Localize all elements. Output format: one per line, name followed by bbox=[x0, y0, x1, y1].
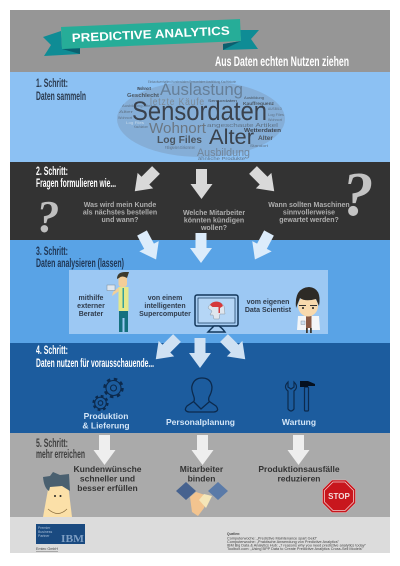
text: customers: besser erfüllen bbox=[77, 483, 138, 493]
heading: step 4: Daten nutzen für vorausschauende... bbox=[36, 358, 154, 370]
icon: tools bbox=[286, 381, 315, 411]
question: customer: als nächstes bestellen bbox=[83, 210, 157, 216]
panel: header bbox=[10, 10, 390, 72]
heading: step 4: 4. Schritt: bbox=[36, 345, 68, 357]
heading: step 2: 2. Schritt: bbox=[36, 166, 68, 178]
panel: step 1 bbox=[10, 72, 390, 162]
panel: step 2 bbox=[10, 161, 390, 242]
text: data scientist: vom eigenen bbox=[247, 299, 289, 306]
sources: Computerwoche: „Praktische Anwendung von Predictive Analytics" bbox=[227, 540, 340, 544]
label: maintenance: Wartung bbox=[282, 417, 316, 427]
question: employees: Welche Mitarbeiter bbox=[183, 210, 245, 217]
heading: step 1 bbox=[36, 78, 86, 103]
word cloud: Wetterdaten bbox=[244, 128, 281, 134]
panel: step 4 bbox=[10, 330, 390, 433]
question: employees bbox=[183, 210, 245, 232]
icon: data scientist bbox=[296, 287, 320, 333]
text: consultant: Berater bbox=[79, 311, 104, 318]
arrows: into step 3 bbox=[132, 228, 279, 265]
heading: step 1: Daten sammeln bbox=[36, 91, 86, 103]
question: customer: Was wird mein Kunde bbox=[84, 202, 156, 209]
logo: IBM premier business partner: IBM bbox=[61, 533, 85, 545]
word cloud: Log Files bbox=[126, 121, 144, 125]
heading: step 4 bbox=[36, 345, 154, 370]
icon: happy customer bbox=[43, 472, 72, 517]
word cloud: ähnliche Produkte bbox=[198, 156, 246, 161]
label: personnel: Personalplanung bbox=[166, 417, 235, 427]
sources: Computerwoche: „Predictive Maintenance spart Geld" bbox=[227, 536, 318, 540]
logo: IBM premier business partner: Business bbox=[38, 530, 52, 534]
text: supercomputer: Supercomputer bbox=[139, 311, 191, 318]
heading: step 5: mehr erreichen bbox=[36, 449, 85, 461]
word cloud: Fähigkeiten Einkommen bbox=[165, 145, 195, 150]
arrows: into step 5 bbox=[94, 435, 310, 465]
sources: Quellen: bbox=[227, 532, 240, 536]
arrows: into step 4 bbox=[148, 330, 253, 368]
word cloud: Wohnort bbox=[149, 120, 207, 137]
text: data scientist bbox=[245, 299, 292, 314]
word cloud: Ausbildung bbox=[197, 147, 250, 159]
icon: question mark left: ? bbox=[36, 191, 60, 242]
text: customers: schneller und bbox=[80, 474, 135, 484]
heading: step 3: 3. Schritt: bbox=[36, 246, 68, 258]
icon: gears bbox=[94, 379, 122, 410]
word cloud: Wohnort bbox=[118, 116, 132, 120]
question: employees: wollen? bbox=[200, 225, 227, 232]
word cloud: Wohnort bbox=[137, 86, 151, 91]
text: customers bbox=[73, 464, 142, 493]
icon: monitor with brain bbox=[195, 295, 238, 332]
label: production bbox=[82, 411, 130, 430]
label: production: & Lieferung bbox=[82, 420, 130, 430]
word cloud: Alter bbox=[119, 110, 135, 114]
word cloud: Einkaufsverhalten Kundendaten Sensordaten Ausbildung Kaufhistorie bbox=[148, 80, 236, 84]
word cloud: Sensordaten bbox=[208, 98, 237, 103]
heading: step 3: Daten analysieren (lassen) bbox=[36, 258, 124, 270]
text: employees bbox=[180, 464, 224, 484]
word cloud: Standort bbox=[250, 144, 268, 148]
text: employees: Mitarbeiter bbox=[180, 464, 224, 474]
heading: step 5: 5. Schritt: bbox=[36, 438, 68, 450]
word cloud: AUSBILD bbox=[268, 107, 282, 111]
arrows: down from cloud bbox=[127, 162, 282, 199]
text: failures: Produktionsausfälle bbox=[258, 464, 340, 474]
text: data scientist: Data Scientist bbox=[245, 307, 292, 314]
text: consultant: externer bbox=[77, 303, 105, 310]
sources: IBM Big Data & Analytics Hub: „7 reasons why you need predictive analytics today" bbox=[227, 544, 367, 548]
icon: question mark right: ? bbox=[342, 161, 374, 229]
icon: consultant bbox=[107, 272, 129, 332]
word cloud: Alter bbox=[258, 136, 274, 142]
text: consultant: mithilfe bbox=[79, 295, 104, 302]
icon: person bbox=[185, 378, 218, 412]
word cloud: Log Files bbox=[268, 113, 284, 117]
heading: step 2 bbox=[36, 166, 116, 190]
question: employees: könnten kündigen bbox=[184, 218, 244, 224]
word cloud: Wohnort bbox=[268, 118, 282, 122]
label: production: Produktion bbox=[84, 411, 128, 421]
word cloud bbox=[117, 80, 285, 161]
icon: stop sign: STOP bbox=[328, 492, 350, 501]
word cloud: Auslastung bbox=[160, 80, 243, 99]
text: failures: reduzieren bbox=[278, 474, 320, 484]
ribbon banner with title bbox=[43, 19, 259, 56]
word cloud: Sensordaten bbox=[132, 96, 267, 126]
question: machines bbox=[268, 202, 350, 224]
question: customer bbox=[83, 202, 157, 224]
word cloud: Log Files bbox=[157, 134, 202, 146]
panel: step 5 bbox=[10, 433, 390, 517]
sources bbox=[227, 532, 367, 551]
word cloud: Kaufdatum bbox=[134, 125, 148, 129]
heading: step 5 bbox=[36, 438, 85, 461]
text: consultant bbox=[77, 295, 105, 318]
panel: step 3 bbox=[10, 228, 390, 343]
question: machines: Wann sollten Maschinen bbox=[268, 202, 350, 209]
sources: Toolbox.com: „Using BPP Data to Create Predictive Analytics Cross-Sell Models" bbox=[227, 547, 364, 551]
question: machines: sinnvollerweise bbox=[283, 210, 335, 216]
heading: step 3 bbox=[36, 246, 124, 270]
icon: stop sign bbox=[322, 480, 356, 512]
ribbon banner with title: PREDICTIVE ANALYTICS bbox=[71, 24, 230, 45]
link: company: Emtec GmbH bbox=[36, 547, 58, 551]
text: employees: binden bbox=[188, 474, 215, 484]
heading: step 1: 1. Schritt: bbox=[36, 78, 68, 90]
icon: handshake bbox=[176, 482, 228, 516]
question: customer: und wann? bbox=[102, 217, 138, 224]
word cloud: Ausbildung Alter bbox=[122, 104, 153, 108]
question: machines: gewartet werden? bbox=[279, 217, 339, 224]
word cloud: Ausbildung bbox=[244, 96, 264, 100]
word cloud: Kauffrequenz bbox=[243, 101, 275, 106]
text: supercomputer bbox=[139, 295, 191, 318]
text: customers: Kundenwünsche bbox=[73, 464, 142, 474]
panel: footer bbox=[10, 517, 390, 553]
logo: IBM premier business partner bbox=[36, 524, 85, 545]
text: supercomputer: von einem bbox=[148, 295, 182, 302]
word cloud: angeschaute Artikel bbox=[207, 123, 278, 129]
text: failures bbox=[258, 464, 340, 484]
logo: IBM premier business partner: Premier bbox=[38, 526, 51, 530]
inner panel: analysis options bbox=[69, 270, 328, 334]
word cloud: Geschlecht bbox=[127, 93, 159, 99]
logo: IBM premier business partner: Partner bbox=[38, 534, 50, 538]
word cloud: Alter bbox=[209, 126, 254, 149]
text: supercomputer: intelligenten bbox=[144, 303, 186, 310]
heading: step 2: Fragen formulieren wie... bbox=[36, 178, 116, 190]
word cloud: letzte Käufe bbox=[150, 97, 205, 108]
